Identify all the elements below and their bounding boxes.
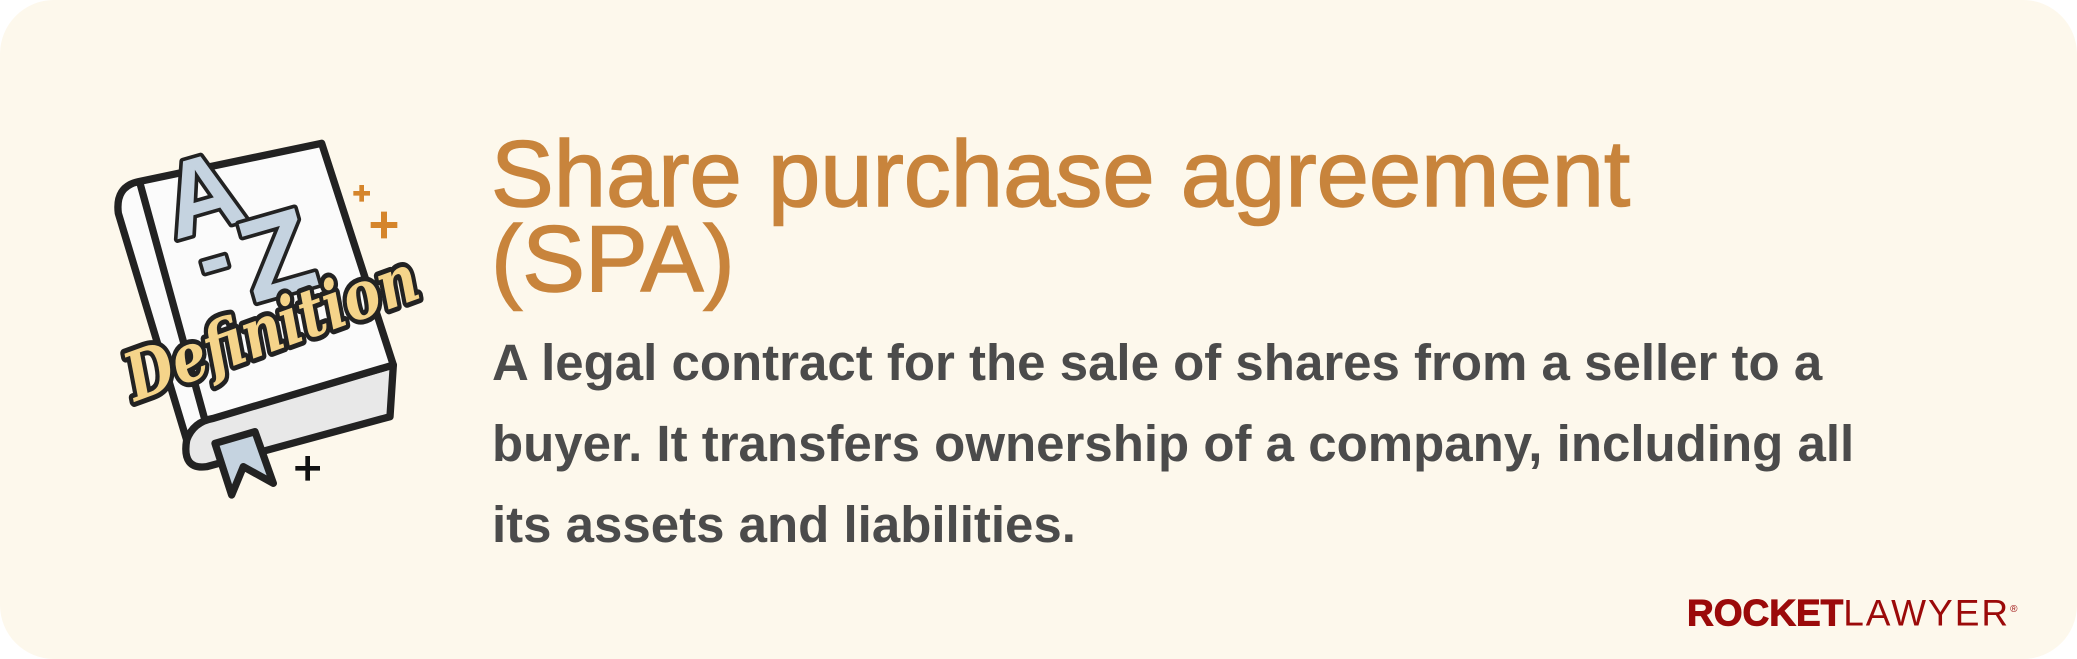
definition text: A legal contract for the sale of shares from a seller to a [492,334,1822,391]
title: Share purchase agreement [491,121,1630,226]
icon: A-Z definition book [112,126,429,499]
definition text: its assets and liabilities. [492,496,1076,553]
title: (SPA) [491,206,735,311]
icon: A-Z definition book: Definition [112,238,429,417]
definition text [492,334,1854,553]
icon: A-Z definition book: Z [224,182,329,327]
icon: A-Z definition book: A [148,126,255,262]
logo: Rocket Lawyer: ROCKETLAWYER® [1687,592,2018,633]
definition text: buyer. It transfers ownership of a company, including all [492,415,1854,472]
title [491,121,1630,312]
icon: A-Z definition book: - [184,202,242,311]
